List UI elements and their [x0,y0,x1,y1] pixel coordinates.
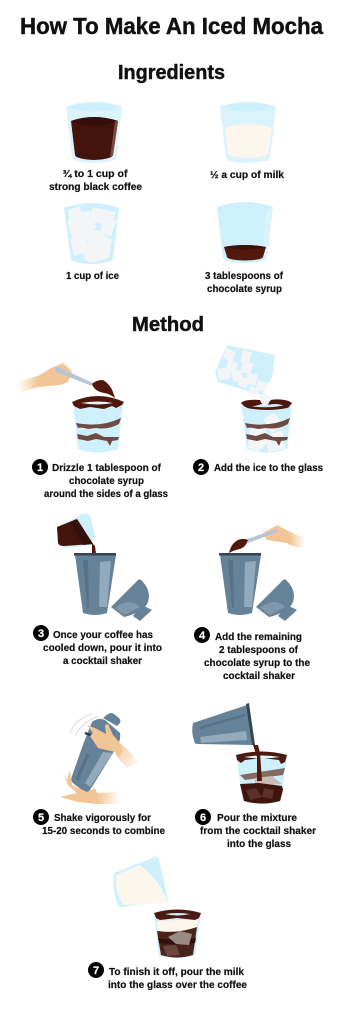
tilted ice glass [215,345,275,406]
syrup drip [92,380,115,398]
label: coffee: strong black coffee [49,181,142,193]
label: coffee: ¾ to 1 cup of [62,168,128,180]
hand [263,525,290,545]
step 3 illustration [57,514,152,621]
step 2 label: Add the ice to the glass [214,462,323,474]
step 5 label: 5 [38,812,44,824]
step 5 label: 15-20 seconds to combine [42,825,165,837]
ingredient: ice glass [64,203,119,264]
step 4 illustration [219,525,305,621]
step 3 label: cooled down, pour it into [43,642,162,654]
step 1 label [32,459,168,500]
heading: ingredients: Ingredients [118,62,225,84]
step 3 label: Once your coffee has [53,629,153,641]
syrup [229,539,248,553]
tilted milk glass [114,857,168,907]
step 4 label: chocolate syrup to the [204,657,310,669]
step 7 illustration [114,857,201,958]
tilted shaker [192,703,255,745]
title: How To Make An Iced Mocha [20,13,324,39]
ingredient: syrup glass [217,202,273,263]
step 6 label [195,809,316,850]
spoon [55,367,93,386]
label: ice: 1 cup of ice [66,270,119,282]
step 1 label: chocolate syrup [69,475,144,487]
step 6 label: Pour the mixture [217,812,297,824]
step 1 label: around the sides of a glass [44,488,168,500]
step 1 label: Drizzle 1 tablespoon of [52,462,161,474]
milk stream [164,903,171,917]
step 3 label: a cocktail shaker [63,655,142,667]
step 4 label [194,627,310,682]
step 2 illustration [215,345,292,452]
step 5 label [33,809,165,837]
step 1 label: 1 [37,462,43,474]
tilted coffee glass [57,514,95,548]
step 5 label: Shake vigorously for [54,812,151,824]
motion lines [70,714,98,736]
glass [154,910,201,958]
step 2 label: 2 [198,462,204,474]
label: syrup [205,270,283,295]
step 5 illustration [60,713,138,804]
step 7 label: into the glass over the coffee [108,979,247,991]
step 7 label: To finish it off, pour the milk [109,966,244,978]
step 3 label [33,625,162,667]
glass with ice [241,399,292,452]
step 6 label: 6 [200,812,206,824]
lower hand [60,770,97,804]
label: syrup: chocolate syrup [207,283,282,295]
glass with syrup [72,396,124,452]
step 7 label [88,962,247,991]
step 6 label: from the cocktail shaker [200,825,316,837]
step 4 label: 2 tablespoons of [219,644,298,656]
label: coffee [49,168,142,193]
step 1 illustration [18,363,124,452]
step 3 label: 3 [38,628,44,640]
step 4 label: cocktail shaker [223,670,295,682]
step 6 illustration [192,703,287,804]
hand [38,363,72,387]
step 4 label: 4 [199,630,206,642]
spoon [247,529,277,543]
glass with coffee [236,752,287,804]
step 7 label: 7 [93,965,99,977]
tilted shaker [71,713,120,792]
ingredient: coffee glass [66,102,122,163]
shaker [219,553,261,615]
shaker [74,553,116,615]
label: milk: ½ a cup of milk [210,169,284,181]
label: syrup: 3 tablespoons of [205,270,283,282]
step 4 label: Add the remaining [215,631,302,643]
ingredient: milk glass [220,102,276,163]
step 6 label: into the glass [227,838,291,850]
stream [253,745,262,781]
step 2 label [193,459,323,475]
upper hand [87,724,122,758]
shaker cap [256,579,297,621]
heading: method: Method [132,314,204,336]
shaker cap [111,579,152,621]
